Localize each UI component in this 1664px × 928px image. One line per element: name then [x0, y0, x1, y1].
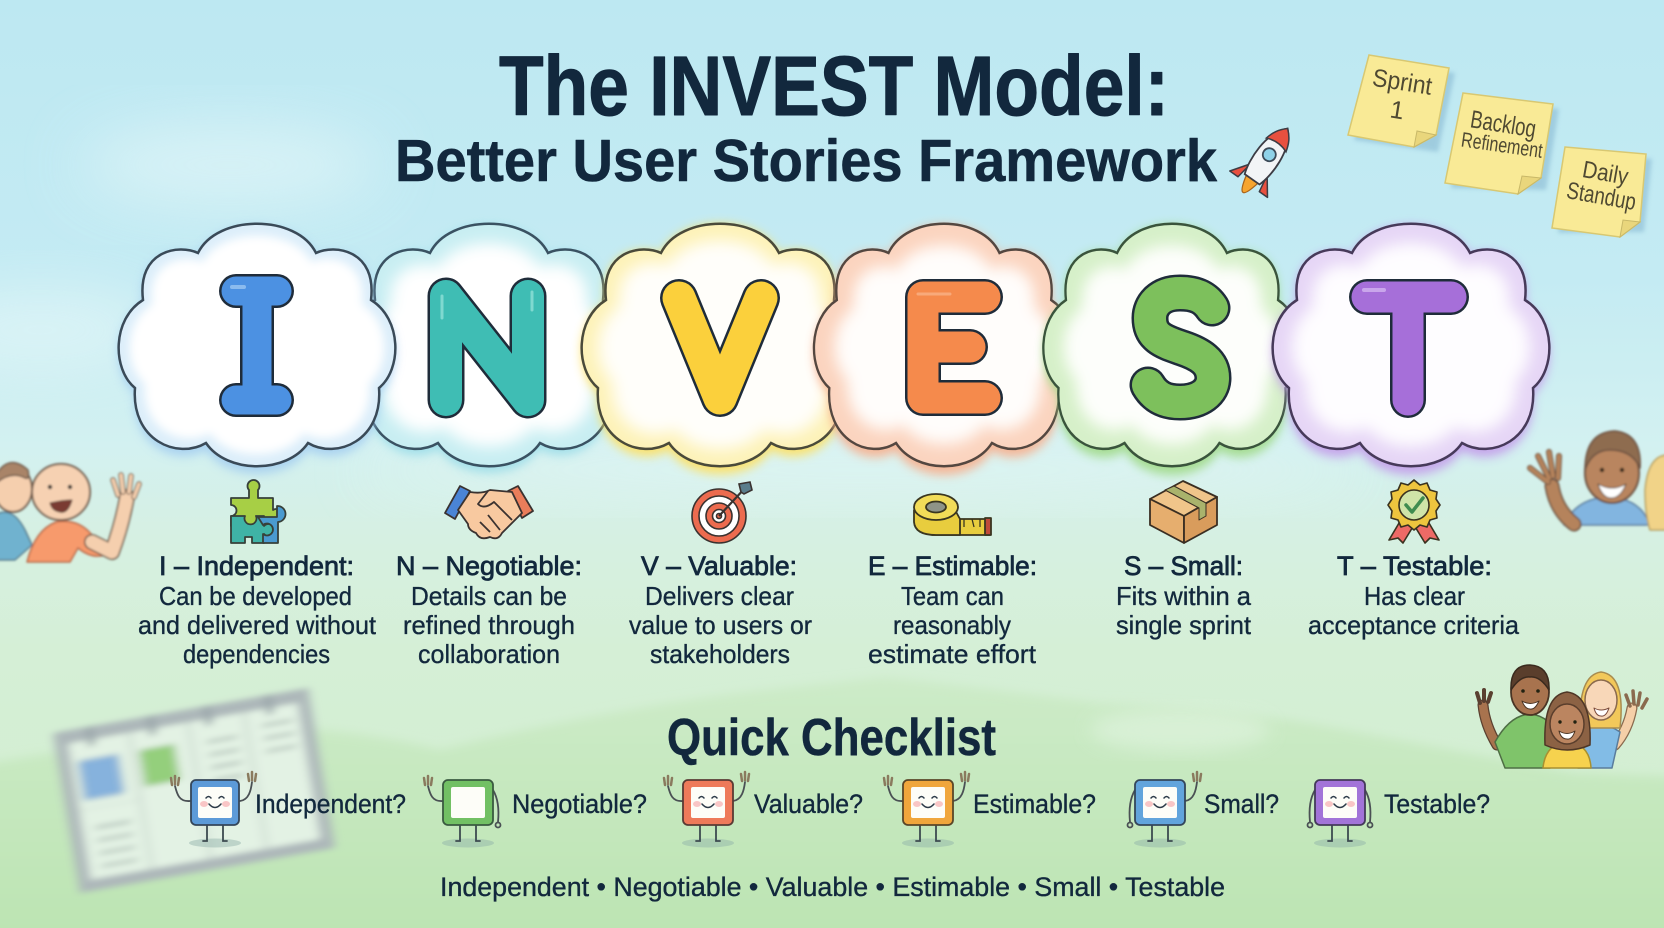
cloud: V [582, 224, 858, 474]
text block: Independent: and delivered without [138, 610, 377, 640]
text block: Small: Fits within a [1116, 581, 1252, 611]
people: left waving pair [0, 463, 139, 562]
subtitle: Better User Stories Framework [395, 128, 1217, 194]
text block: Valuable: Delivers clear [645, 581, 794, 611]
sticky note: Sprint 1: Sprint [1370, 64, 1434, 101]
text block: Negotiable: refined through [403, 610, 575, 640]
text block: Small: single sprint [1116, 610, 1252, 640]
text block: Valuable: stakeholders [650, 639, 790, 669]
background kanban board [53, 688, 335, 893]
text block: Testable: T – Testable: [1337, 551, 1492, 581]
text block: Valuable [629, 551, 812, 669]
letter N [442, 292, 532, 400]
sticky note: Daily Standup: Standup [1564, 177, 1638, 216]
letter T [1364, 290, 1451, 400]
sticky note: Backlog Refinement [1445, 93, 1559, 194]
checklist mascot: Negotiable [424, 776, 500, 848]
definitions [138, 551, 1520, 669]
title line 1: The INVEST Model: [499, 39, 1169, 133]
text block: Estimable: estimate effort [868, 639, 1037, 669]
checklist mascot: Independent [171, 772, 256, 848]
text block: Small [1116, 551, 1252, 640]
checklist label: Negotiable: Negotiable? [512, 789, 647, 819]
sticky note: Backlog Refinement: Refinement [1460, 129, 1544, 163]
text block: Independent: Can be developed [159, 581, 352, 611]
icon: award badge [1388, 480, 1440, 543]
icon: target with arrow [692, 482, 752, 543]
checklist label: Estimable: Estimable? [973, 789, 1096, 819]
text block: Valuable: value to users or [629, 610, 812, 640]
icon: handshake [445, 486, 533, 538]
cloud: I [119, 224, 395, 474]
text block: Estimable: E – Estimable: [868, 551, 1037, 581]
checklist label: Small: Small? [1204, 789, 1279, 819]
text block: Estimable [868, 551, 1037, 669]
icon: puzzle pieces [231, 480, 286, 543]
letter S [1148, 293, 1213, 402]
letter I [232, 287, 277, 400]
icon: tape measure [914, 494, 991, 535]
text block: Testable [1308, 551, 1520, 640]
checklist label: Testable: Testable? [1384, 789, 1490, 819]
checklist mascot: Small [1128, 772, 1201, 848]
text block: Independent: I – Independent: [159, 551, 354, 581]
cloud: T [1273, 224, 1549, 475]
sticky note: Sprint 1 [1348, 55, 1455, 152]
text block: Estimable: Team can [901, 581, 1004, 611]
icon: rocket [1224, 115, 1306, 206]
sticky note: Daily Standup: Daily [1580, 156, 1630, 191]
text block: Small: S – Small: [1124, 551, 1243, 581]
text block: Independent: dependencies [183, 639, 330, 669]
INVEST cloud row [119, 224, 1549, 475]
checklist mascot: Valuable [664, 772, 749, 848]
cloud: E [814, 224, 1074, 475]
checklist label: Valuable: Valuable? [754, 789, 863, 819]
letter V [679, 298, 761, 398]
people: lower right group [1477, 665, 1647, 768]
text block: Testable: Has clear [1364, 581, 1465, 611]
text block: Negotiable [396, 551, 582, 669]
cloud: S [1043, 224, 1301, 475]
text block: Valuable: V – Valuable: [641, 551, 797, 581]
sticky note: Daily Standup [1552, 147, 1652, 237]
checklist mascot: Estimable [884, 772, 969, 848]
sticky note: Sprint 1: 1 [1388, 95, 1406, 125]
footer summary line: Independent • Negotiable • Valuable • Estimable • Small • Testable [440, 872, 1225, 902]
checklist row [171, 772, 1490, 848]
people: right waving pair [1530, 431, 1664, 530]
text block: Independent [138, 551, 377, 669]
sticky note: Backlog Refinement: Backlog [1468, 105, 1538, 143]
text block: Negotiable: collaboration [418, 639, 560, 669]
text block: Testable: acceptance criteria [1308, 610, 1520, 640]
text block: Negotiable: N – Negotiable: [396, 551, 582, 581]
sticky notes [1348, 55, 1652, 237]
icon: cardboard box [1150, 481, 1217, 543]
cloud: N [351, 224, 627, 473]
letter E [918, 294, 985, 398]
checklist label: Independent: Independent? [255, 789, 406, 819]
checklist mascot: Testable [1308, 780, 1372, 848]
checklist heading: Quick Checklist [667, 709, 996, 767]
icons row [231, 480, 1440, 543]
text block: Estimable: reasonably [893, 610, 1011, 640]
text block: Negotiable: Details can be [411, 581, 567, 611]
